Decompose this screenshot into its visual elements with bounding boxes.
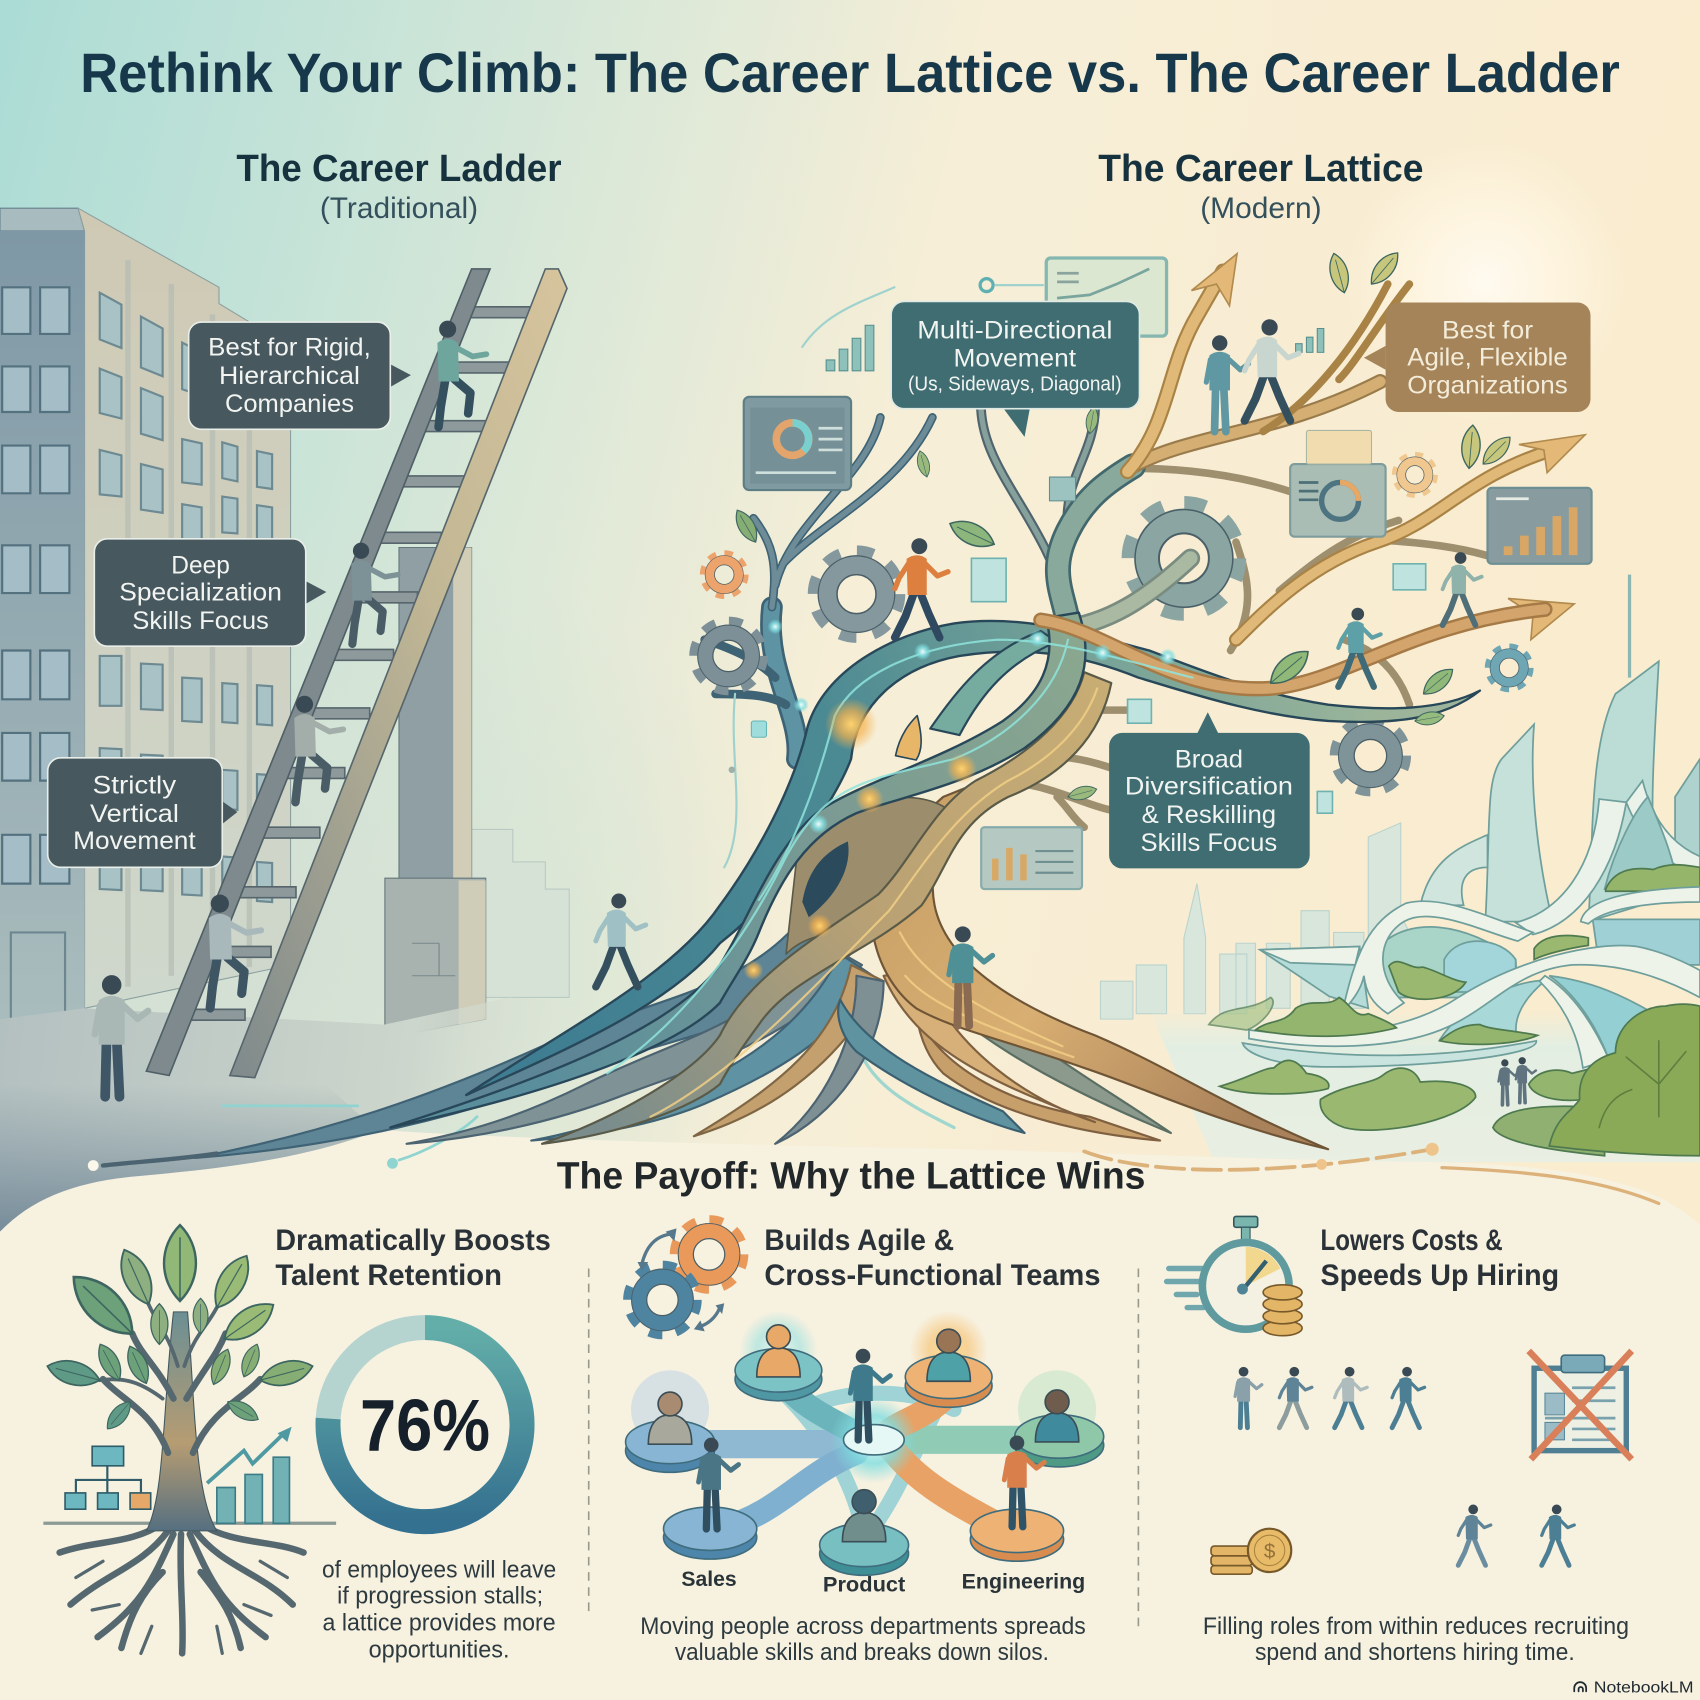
modern city landscape bbox=[1100, 575, 1700, 1162]
sun glow bbox=[1344, 141, 1626, 423]
callout: strictly vertical: Vertical bbox=[90, 800, 179, 828]
callout: best for rigid: Hierarchical bbox=[219, 362, 360, 390]
text: retention description: if progression stalls; bbox=[337, 1583, 543, 1610]
callout: broad diversification: & Reskilling bbox=[1142, 801, 1276, 829]
text: costs description: spend and shortens hiring time. bbox=[1255, 1639, 1575, 1666]
labels: departments bbox=[681, 1566, 1085, 1597]
callout: multi-directional movement bbox=[891, 301, 1139, 437]
icon: growth bars bbox=[207, 1427, 292, 1523]
climbers on the ladder bbox=[95, 321, 486, 1097]
callout: broad diversification: Broad bbox=[1175, 746, 1243, 774]
left stem and twigs bbox=[705, 396, 1095, 759]
text: teams description: Moving people across departments spreads bbox=[640, 1613, 1086, 1640]
bridge building bbox=[1440, 980, 1546, 1040]
branch into the gear bbox=[1062, 558, 1190, 629]
glowing nodes bbox=[744, 619, 1176, 980]
callout: best for agile: Best for bbox=[1442, 316, 1533, 344]
distant buildings bbox=[472, 829, 569, 997]
callout: best for rigid bbox=[189, 322, 411, 429]
callout: best for agile bbox=[1364, 302, 1590, 412]
callout: best for agile: Organizations bbox=[1407, 372, 1568, 400]
callout: deep specialization: Deep bbox=[171, 552, 230, 580]
pale skyline bbox=[1100, 823, 1412, 1019]
text: costs description: Filling roles from within reduces recruiting bbox=[1203, 1613, 1629, 1640]
callout: multi-directional movement: (Us, Sideways, Diagonal) bbox=[908, 372, 1122, 395]
text: retention description: a lattice provides more bbox=[323, 1610, 556, 1637]
title: Rethink Your Climb: The Career Lattice vs. The Career Ladder bbox=[80, 42, 1620, 104]
ladder bbox=[146, 269, 567, 1078]
callout: deep specialization: Specialization bbox=[119, 579, 282, 607]
heading: costs and hiring: Lowers Costs & bbox=[1321, 1225, 1503, 1257]
watermark: notebooklm: NotebookLM bbox=[1594, 1679, 1693, 1696]
icon: growing tree bbox=[43, 1225, 336, 1653]
arrow branch: upper right bbox=[1236, 449, 1556, 640]
tree: roots bbox=[103, 911, 1171, 1165]
callout: strictly vertical: Strictly bbox=[93, 772, 177, 800]
callout: best for rigid: Best for Rigid, bbox=[208, 334, 371, 362]
callout: strictly vertical bbox=[48, 758, 237, 867]
upward branch bbox=[1030, 466, 1133, 737]
heading: talent retention bbox=[275, 1225, 551, 1292]
heading: the career ladder: (Traditional) bbox=[320, 193, 478, 225]
labels: departments: Sales bbox=[681, 1566, 737, 1591]
walking pair bbox=[1499, 1059, 1519, 1105]
twisted trunk strands bbox=[390, 613, 1480, 1149]
callout: strictly vertical: Movement bbox=[73, 827, 196, 855]
decorative path dots bbox=[88, 1041, 1659, 1203]
people on the tree bbox=[596, 319, 1482, 1026]
heading: talent retention: Talent Retention bbox=[275, 1260, 502, 1292]
heading: cross-functional teams: Builds Agile & bbox=[764, 1225, 954, 1257]
heading: the payoff: The Payoff: Why the Lattice Wins bbox=[557, 1155, 1145, 1197]
text: retention description: of employees will leave bbox=[322, 1556, 556, 1583]
callout: best for agile: Agile, Flexible bbox=[1407, 343, 1568, 371]
text: costs description bbox=[1203, 1613, 1629, 1666]
callout: deep specialization bbox=[94, 539, 326, 646]
callout: broad diversification bbox=[1109, 712, 1310, 868]
icon: two employees bbox=[1458, 1505, 1574, 1565]
icon: coins: $ bbox=[1264, 1540, 1276, 1563]
shell building bbox=[1379, 927, 1518, 997]
icon: org chart bbox=[65, 1446, 151, 1509]
curved towers bbox=[1628, 575, 1631, 678]
callout: best for rigid: Companies bbox=[225, 390, 354, 418]
panel: costs and hiring bbox=[1167, 1216, 1632, 1666]
leaves bbox=[731, 247, 1516, 803]
left wing bbox=[1260, 946, 1368, 1008]
icon: coins bbox=[1211, 1529, 1291, 1574]
panel: cross-functional teams bbox=[626, 1221, 1104, 1666]
ground bbox=[0, 997, 607, 1241]
text: retention description bbox=[322, 1556, 556, 1664]
thin side branches bbox=[1014, 468, 1496, 827]
text: retention description: opportunities. bbox=[369, 1637, 510, 1664]
arrow branch: lower right bbox=[1041, 609, 1545, 689]
gears on the tree bbox=[696, 456, 1530, 790]
text: teams description bbox=[640, 1613, 1086, 1666]
concrete pillar bbox=[385, 548, 486, 1032]
icon: four employees walking bbox=[1235, 1367, 1425, 1428]
icon: stopwatch and coins bbox=[1167, 1216, 1302, 1336]
heading: the career ladder: The Career Ladder bbox=[236, 148, 562, 190]
heading: costs and hiring bbox=[1321, 1225, 1559, 1292]
callout: broad diversification: Skills Focus bbox=[1141, 829, 1277, 857]
donut chart: 76% bbox=[328, 1328, 522, 1522]
arrowheads bbox=[1192, 254, 1585, 640]
bottom panel: the payoff bbox=[0, 1130, 1700, 1700]
panel: talent retention bbox=[43, 1225, 556, 1664]
heading: the career lattice bbox=[1098, 148, 1424, 225]
arrow branch: up bbox=[1128, 271, 1223, 472]
rooftop garden building bbox=[1593, 919, 1700, 965]
callout: multi-directional movement: Multi-Directional bbox=[917, 316, 1112, 344]
dividers bbox=[589, 1268, 1138, 1626]
icon: crossed-out clipboard bbox=[1529, 1351, 1632, 1459]
heading: costs and hiring: Speeds Up Hiring bbox=[1321, 1260, 1559, 1292]
donut chart: 76%: 76% bbox=[360, 1384, 490, 1467]
heading: talent retention: Dramatically Boosts bbox=[275, 1225, 551, 1257]
labels: departments: Engineering bbox=[962, 1568, 1085, 1593]
horizon haze bbox=[0, 499, 802, 1409]
hedges and lawns bbox=[1255, 997, 1396, 1036]
text: teams description: valuable skills and breaks down silos. bbox=[675, 1639, 1049, 1666]
callout: broad diversification: Diversification bbox=[1125, 773, 1293, 801]
heading: the career ladder bbox=[236, 148, 562, 225]
icon: gears bbox=[629, 1221, 742, 1333]
labels: departments: Product bbox=[823, 1572, 905, 1597]
lattice network diagram bbox=[626, 1311, 1104, 1575]
callout: multi-directional movement: Movement bbox=[954, 344, 1076, 372]
ground plane bbox=[1149, 1008, 1700, 1162]
heading: cross-functional teams bbox=[764, 1225, 1100, 1292]
callout: deep specialization: Skills Focus bbox=[132, 607, 269, 635]
circuit lines on the tree bbox=[607, 640, 1193, 1117]
dashboard widgets bbox=[724, 258, 1592, 889]
tree: trunk and branches bbox=[705, 271, 1556, 827]
office building bbox=[0, 208, 291, 1019]
heading: the career lattice: The Career Lattice bbox=[1098, 148, 1424, 190]
heading: cross-functional teams: Cross-Functional Teams bbox=[764, 1260, 1100, 1292]
heading: the career lattice: (Modern) bbox=[1200, 193, 1322, 225]
